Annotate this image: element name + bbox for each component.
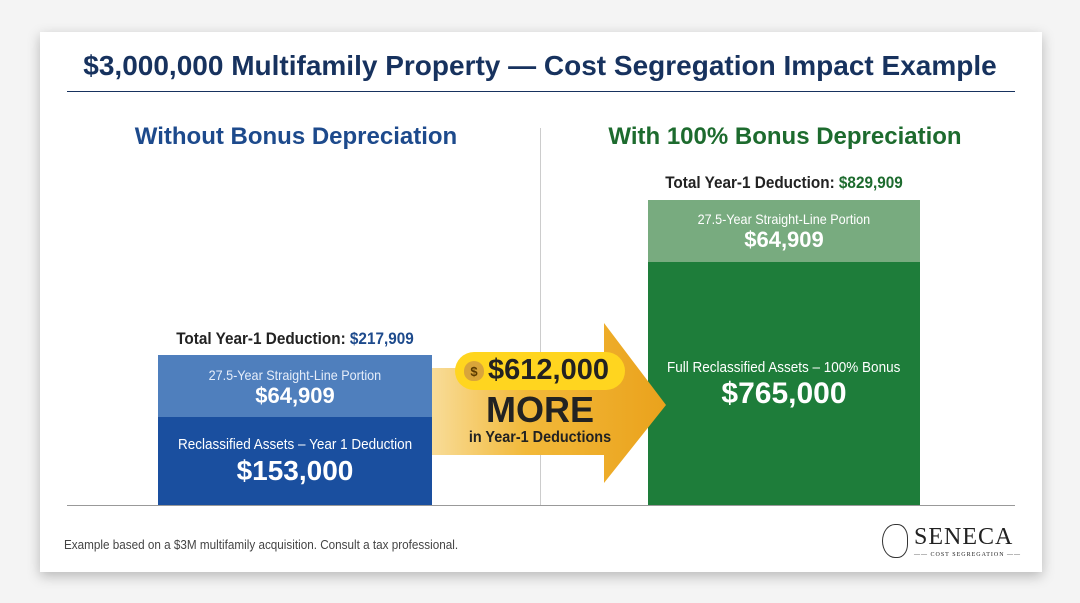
heading: with bonus: With 100% Bonus Depreciation: [608, 123, 962, 150]
right bottom segment: $765,000: [721, 377, 847, 410]
right top segment: $64,909: [744, 227, 824, 252]
logo: SENECA: [914, 524, 1013, 550]
right total label: Total Year-1 Deduction: $829,909: [665, 173, 903, 192]
left bottom segment: $153,000: [237, 455, 353, 486]
icon: money bag: $: [470, 364, 478, 379]
callout: savings: $612,000: [488, 354, 609, 386]
logo: [882, 524, 1021, 558]
left top segment: [158, 355, 432, 417]
right bottom segment: [648, 262, 920, 505]
callout: savings: [455, 352, 625, 446]
right top segment: 27.5-Year Straight-Line Portion: [698, 211, 870, 227]
pill: [455, 352, 625, 390]
left top segment: 27.5-Year Straight-Line Portion: [209, 367, 381, 383]
left bottom segment: [158, 417, 432, 505]
right bar: [648, 200, 920, 505]
title: $3,000,000 Multifamily Property — Cost Segregation Impact Example: [83, 50, 997, 81]
arrow: [432, 323, 666, 483]
callout: savings: MORE: [486, 389, 594, 430]
icon: head: [882, 524, 908, 558]
left total label: Total Year-1 Deduction: $217,909: [176, 329, 414, 348]
icon: money bag: [464, 361, 484, 381]
heading: without bonus: Without Bonus Depreciation: [135, 123, 457, 150]
left top segment: $64,909: [255, 383, 335, 408]
footnote: Example based on a $3M multifamily acquisition. Consult a tax professional.: [64, 537, 458, 552]
left bottom segment: Reclassified Assets – Year 1 Deduction: [178, 436, 412, 453]
logo: —— COST SEGREGATION ——: [914, 552, 1021, 558]
right bottom segment: Full Reclassified Assets – 100% Bonus: [667, 359, 901, 376]
callout: savings: in Year-1 Deductions: [469, 429, 611, 446]
left bar: [158, 355, 432, 505]
right top segment: [648, 200, 920, 262]
